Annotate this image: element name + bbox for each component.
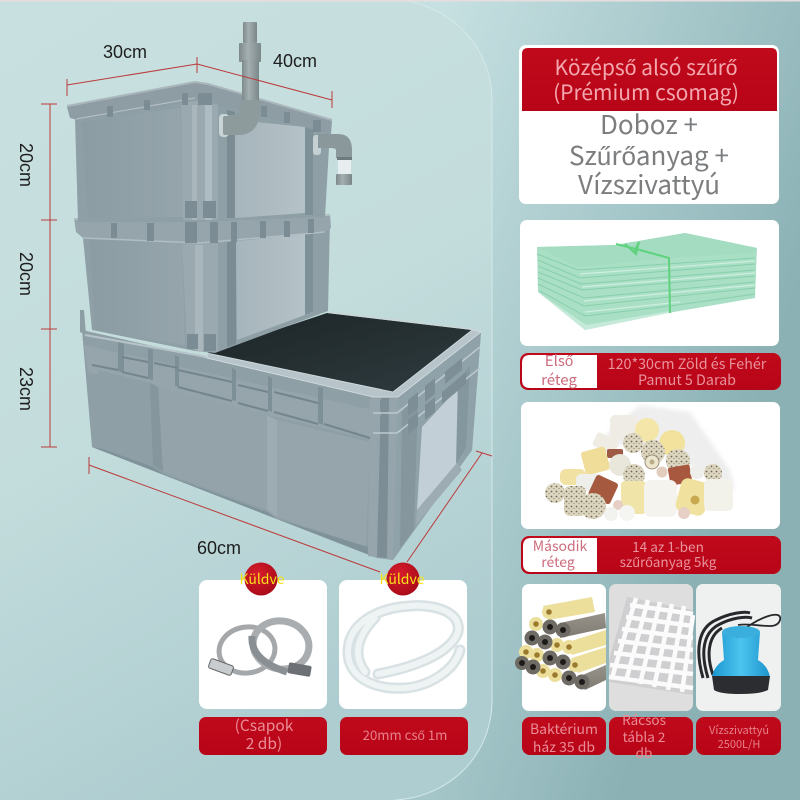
label: first layer: réteg (541, 369, 577, 390)
dimension label: height 20cm upper: 20cm (16, 143, 36, 187)
badge: Küldve left (240, 562, 285, 596)
icon: submersible pump (699, 612, 780, 694)
panel: pump (696, 584, 781, 711)
icon: stacked bio bricks (515, 597, 606, 690)
label: second layer: Második (533, 536, 588, 556)
package contents (569, 105, 729, 202)
label: 20mm cso: 20mm cső 1m (363, 725, 447, 744)
label: second layer: réteg (541, 552, 575, 572)
label: grid plate: tábla 2 (623, 726, 665, 746)
label: Csapok 2 db: (Csapok (235, 714, 294, 736)
label: bacteria house: ház 35 db (533, 737, 595, 757)
label: first layer: 120*30cm Zöld és Fehér (608, 353, 767, 374)
badge: Küldve right: Küldve (380, 569, 425, 589)
header banner: Középső alsó szűrő (555, 52, 737, 82)
panel: grid plate (609, 584, 693, 711)
label: first layer: Pamut 5 Darab (638, 369, 736, 390)
package contents: Vízszivattyú (578, 165, 720, 202)
label: bacteria house: Baktérium (530, 719, 598, 739)
label: water pump: Vízszivattyú (709, 722, 769, 738)
panel: tube (339, 580, 467, 709)
label: second layer: 14 az 1-ben (632, 536, 704, 556)
icon: hose clamps (208, 617, 313, 677)
pipe: vertical inlet with elbow (219, 22, 261, 137)
panel: clamps (199, 580, 327, 709)
package contents: Doboz + (600, 105, 698, 142)
pipe: side outlet with elbow (313, 134, 352, 185)
label: Csapok 2 db (199, 714, 327, 755)
panel: filter media (521, 402, 780, 529)
header banner (522, 48, 777, 111)
header card (519, 45, 779, 204)
label: grid plate (609, 709, 693, 762)
panel: bacteria house (515, 584, 606, 711)
label: first layer (520, 350, 781, 390)
icon: green cotton stack (537, 233, 757, 330)
dimension label: 60cm: 60cm (197, 538, 241, 558)
label: first layer: Első (545, 350, 573, 371)
icon: ceramic rings and bio balls (545, 405, 735, 521)
illustration: stacked filter boxes (67, 22, 481, 560)
label: 20mm cso (340, 717, 468, 755)
top crate (67, 82, 332, 222)
dimension label: 40cm: 40cm (273, 51, 317, 71)
dimension lines (41, 57, 492, 572)
label: second layer (521, 536, 781, 574)
label: water pump (696, 717, 781, 755)
header banner: (Prémium csomag) (553, 77, 739, 107)
dimension label: height 23cm: 23cm (16, 367, 36, 411)
dimension label: 30cm: 30cm (103, 42, 147, 62)
badge: Küldve left: Küldve (240, 569, 285, 589)
label: water pump: 2500L/H (718, 736, 760, 752)
label: grid plate: Rácsos (622, 709, 666, 729)
dimension label: height 20cm lower: 20cm (16, 252, 36, 296)
middle crate (74, 214, 331, 353)
icon: silicone tube coil (348, 606, 460, 688)
icon: white lattice plate (609, 597, 693, 695)
label: bacteria house (522, 717, 606, 757)
label: second layer: szűrőanyag 5kg (620, 551, 717, 571)
label: Csapok 2 db: 2 db) (246, 732, 282, 754)
rounded left panel (0, 0, 492, 800)
badge: Küldve right (380, 562, 425, 596)
label: grid plate: db (636, 742, 652, 762)
panel: filter cotton (520, 220, 779, 346)
bottom crate (80, 310, 481, 560)
package contents: Szűrőanyag + (569, 136, 729, 173)
